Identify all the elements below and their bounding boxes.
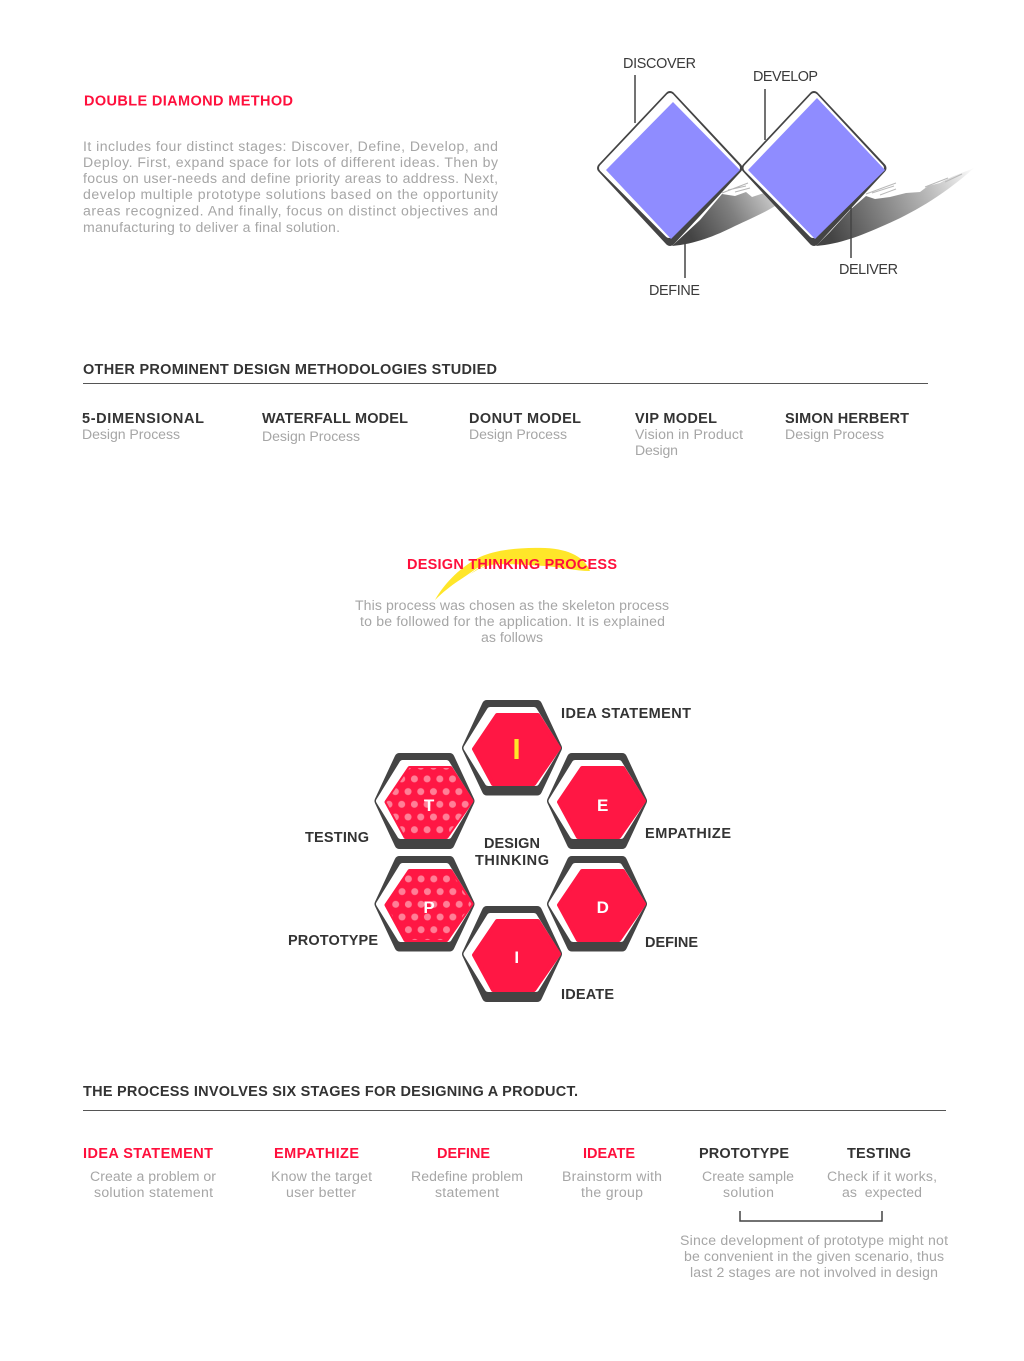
text block: double diamond description: Deploy. First, expand space for lots of different ideas. Then by: [83, 154, 499, 170]
hexagon: testing: T: [424, 796, 435, 815]
label: prototype: PROTOTYPE: [288, 933, 378, 949]
stage: ideate: IDEATE: [583, 1146, 635, 1162]
hexagon: define: D: [597, 898, 609, 917]
stage: testing: TESTING: [847, 1146, 911, 1162]
panel: six stages: [83, 1084, 948, 1280]
text block: bracket note: [680, 1232, 948, 1280]
text block: bracket note: be convenient in the given scenario, thus: [684, 1248, 944, 1264]
stage: define: Redefine problem: [411, 1168, 523, 1184]
label: design thinking centre: DESIGN: [484, 836, 540, 852]
label: testing: TESTING: [305, 830, 369, 846]
label: define: [649, 238, 700, 299]
text block: bracket note: Since development of prototype might not: [680, 1232, 948, 1248]
item: donut model: Design Process: [469, 426, 567, 442]
label: ideate: IDEATE: [561, 987, 614, 1003]
text block: design thinking description: as follows: [481, 629, 543, 645]
stage: ideate: [562, 1146, 662, 1200]
label: empathize: EMPATHIZE: [645, 826, 731, 842]
item: donut model: [469, 411, 581, 442]
text block: double diamond description: develop multiple prototype solutions based on the opportunity: [83, 186, 499, 202]
item: 5-dimensional: [82, 411, 204, 442]
label: design thinking centre: THINKING: [475, 853, 549, 869]
item: waterfall model: [262, 411, 408, 444]
item: simon herbert: Design Process: [785, 426, 884, 442]
hexagon: ideate: I: [514, 948, 519, 967]
stage: testing: Check if it works,: [827, 1168, 937, 1184]
text block: bracket note: last 2 stages are not involved in design: [690, 1264, 938, 1280]
item: donut model: DONUT MODEL: [469, 411, 581, 427]
text block: double diamond description: [83, 138, 499, 235]
label: deliver: [839, 207, 898, 278]
brush stroke: yellow highlight: [435, 548, 590, 600]
stage: ideate: the group: [581, 1184, 643, 1200]
diamond: first: [602, 96, 740, 241]
panel: design thinking intro: [355, 548, 669, 645]
panel: double diamond intro: [83, 94, 499, 235]
stage: prototype: PROTOTYPE: [699, 1146, 789, 1162]
hexagon: prototype: P: [423, 898, 435, 917]
stage: empathize: [271, 1146, 372, 1200]
item: waterfall model: Design Process: [262, 428, 360, 444]
stage: prototype: solution: [723, 1184, 774, 1200]
text block: double diamond description: focus on user-needs and define priority areas to address. Next,: [83, 170, 498, 186]
item: waterfall model: WATERFALL MODEL: [262, 411, 408, 427]
stage: idea statement: Create a problem or: [90, 1168, 216, 1184]
text block: design thinking description: This process was chosen as the skeleton process: [355, 597, 669, 613]
hexagon: idea statement: [466, 705, 559, 790]
brush stroke: first diamond shadow: [672, 183, 775, 246]
item: vip model: VIP MODEL: [635, 411, 717, 427]
hexagon: prototype: [379, 861, 472, 946]
hexagon: empathize: E: [597, 796, 608, 815]
stage: idea statement: IDEA STATEMENT: [83, 1146, 213, 1162]
label: discover: [623, 56, 696, 123]
label: deliver: DELIVER: [839, 262, 898, 278]
stage: idea statement: solution statement: [94, 1184, 213, 1200]
label: define: DEFINE: [645, 935, 698, 951]
hexagon: define: [552, 861, 644, 946]
stage: empathize: Know the target: [271, 1168, 372, 1184]
heading: design thinking process: DESIGN THINKING PROCESS: [407, 557, 617, 573]
stage: testing: [827, 1146, 937, 1200]
chart: double diamond diagram: [602, 56, 974, 299]
panel: other methodologies: [82, 362, 928, 458]
diamond: second: [746, 96, 885, 241]
label: discover: DISCOVER: [623, 56, 696, 72]
hexagon: testing: [379, 758, 472, 844]
stage: define: DEFINE: [437, 1146, 490, 1162]
stage: prototype: [699, 1146, 794, 1200]
text block: double diamond description: manufacturing to deliver a final solution.: [83, 219, 340, 235]
item: simon herbert: [785, 411, 909, 442]
stage: define: statement: [435, 1184, 499, 1200]
item: 5-dimensional: Design Process: [82, 426, 180, 442]
item: vip model: Design: [635, 442, 678, 458]
text block: double diamond description: areas recognized. And finally, focus on distinct objectives and: [83, 202, 498, 218]
item: 5-dimensional: 5-DIMENSIONAL: [82, 411, 204, 427]
item: vip model: [635, 411, 743, 458]
stage: idea statement: [83, 1146, 216, 1200]
hexagon: ideate: [466, 911, 559, 997]
stage: empathize: user better: [286, 1184, 356, 1200]
text block: design thinking description: to be followed for the application. It is explained: [360, 613, 665, 629]
stage: empathize: EMPATHIZE: [274, 1146, 359, 1162]
stage: testing: as expected: [842, 1184, 922, 1200]
label: develop: DEVELOP: [753, 69, 818, 85]
brush stroke: second diamond shadow: [816, 168, 974, 246]
heading: other methodologies: OTHER PROMINENT DESIGN METHODOLOGIES STUDIED: [83, 362, 497, 378]
stage: prototype: Create sample: [702, 1168, 794, 1184]
hexagon: empathize: [552, 758, 644, 844]
item: simon herbert: SIMON HERBERT: [785, 411, 909, 427]
stage: ideate: Brainstorm with: [562, 1168, 662, 1184]
heading: six stages: THE PROCESS INVOLVES SIX STAGES FOR DESIGNING A PRODUCT.: [83, 1084, 578, 1100]
label: design thinking centre: [475, 836, 549, 869]
label: define: DEFINE: [649, 283, 700, 299]
hexagon: idea statement: I: [512, 734, 521, 766]
text block: double diamond description: It includes four distinct stages: Discover, Define, Develop, and: [83, 138, 498, 154]
heading: double diamond method: DOUBLE DIAMOND METHOD: [84, 94, 293, 110]
item: vip model: Vision in Product: [635, 426, 743, 442]
text block: design thinking description: [355, 597, 669, 645]
stage: define: [411, 1146, 523, 1200]
label: idea statement: IDEA STATEMENT: [561, 706, 691, 722]
bracket: last two stages: [740, 1211, 882, 1221]
chart: design thinking hexagon cycle: [288, 705, 731, 1003]
label: develop: [753, 69, 818, 140]
